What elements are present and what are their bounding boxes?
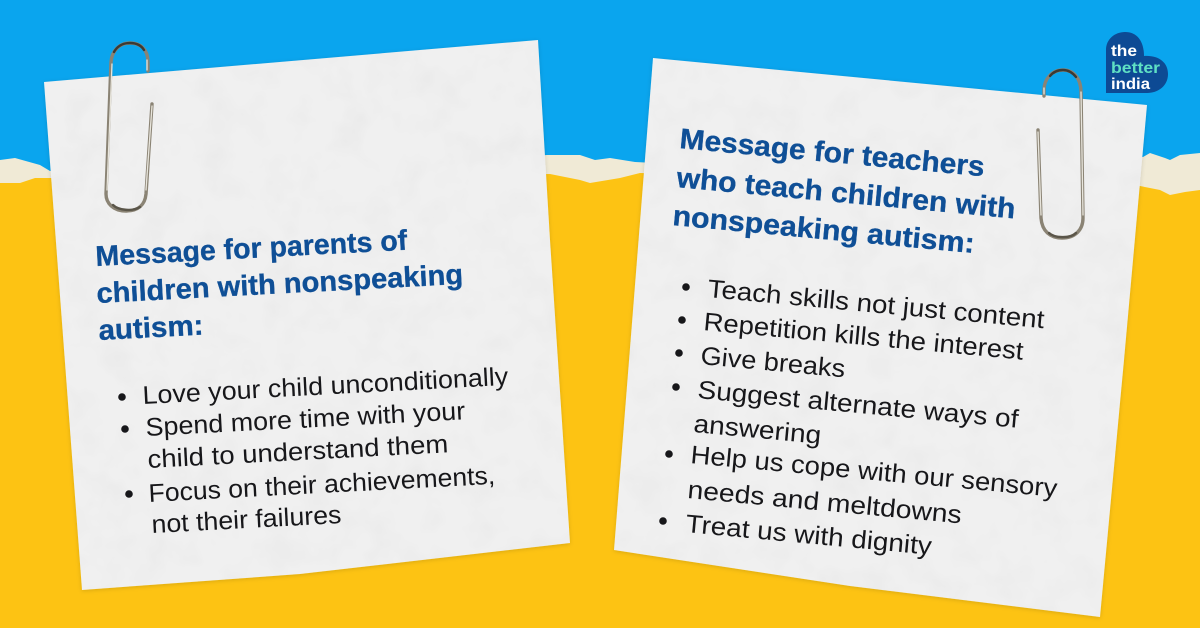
right note bullet list: Teach skills not just content xyxy=(706,275,1046,334)
right note bullet list: Treat us with dignity xyxy=(684,510,933,561)
left note xyxy=(43,40,571,592)
left note heading: Message for parents of xyxy=(95,225,408,273)
left note bullet list: not their failures xyxy=(151,501,342,539)
background: yellow lower half xyxy=(0,173,1200,628)
background: blue upper half xyxy=(0,0,1200,190)
left note bullet list: Focus on their achievements, xyxy=(148,462,496,508)
logo: the better india: india xyxy=(1111,76,1150,93)
left note bullet list: Spend more time with your xyxy=(145,397,466,442)
right note heading: nonspeaking autism: xyxy=(671,200,976,260)
right note xyxy=(613,58,1148,619)
right note bullet list: answering xyxy=(692,410,822,450)
right note bullet list: needs and meltdowns xyxy=(686,476,963,529)
left note bullet list xyxy=(118,363,509,539)
right note heading: Message for teachers xyxy=(678,123,986,183)
left note bullet list: child to understand them xyxy=(147,430,449,474)
left note heading: autism: xyxy=(98,310,204,347)
left note heading xyxy=(95,225,464,347)
left note paper xyxy=(43,40,571,592)
right note bullet list: Give breaks xyxy=(699,342,846,383)
right note paper xyxy=(613,58,1148,619)
logo: the better india: the xyxy=(1111,43,1137,60)
left note bullet list: Love your child unconditionally xyxy=(142,363,509,410)
right note bullet list: Repetition kills the interest xyxy=(702,308,1025,366)
icon: right paperclip xyxy=(1038,70,1083,238)
right note heading: who teach children with xyxy=(674,162,1017,225)
logo: the better india xyxy=(1106,32,1168,93)
logo: the better india: better xyxy=(1111,60,1160,77)
icon: left paperclip xyxy=(106,43,152,211)
right note bullet list xyxy=(659,275,1059,561)
background: torn cream paper edge xyxy=(0,153,1200,210)
left note heading: children with nonspeaking xyxy=(96,259,464,310)
right note bullet list: Help us cope with our sensory xyxy=(689,441,1059,503)
right note heading xyxy=(671,123,1017,260)
right note bullet list: Suggest alternate ways of xyxy=(696,376,1021,434)
